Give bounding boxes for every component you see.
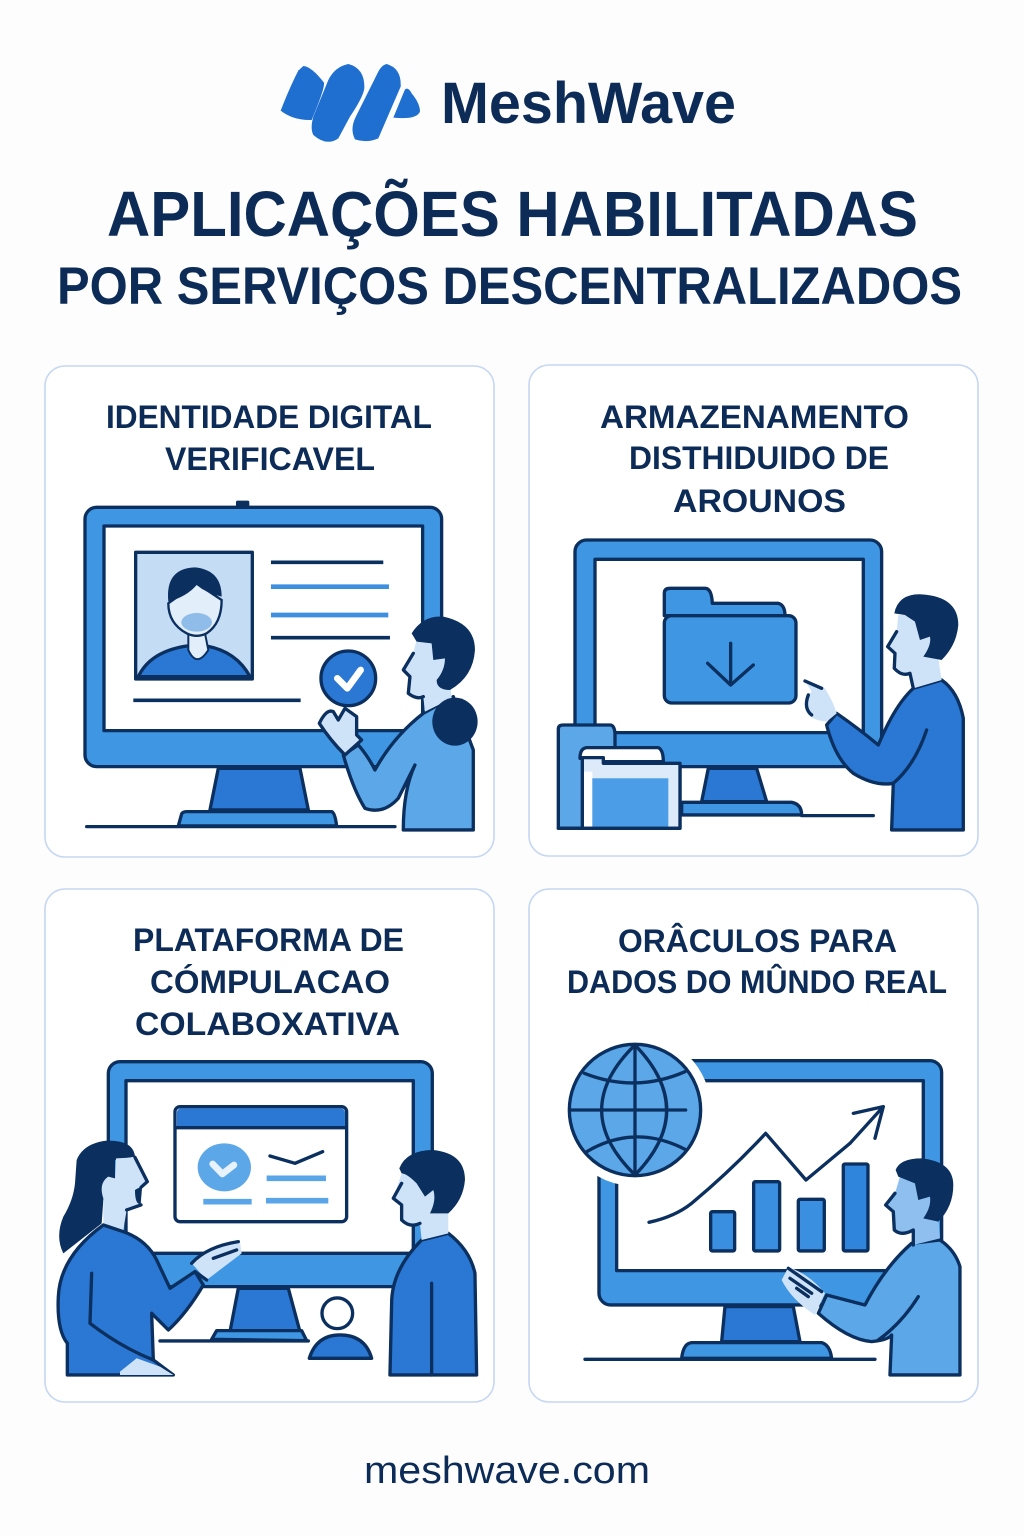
title: APLICAÇÕES HABILITADAS	[107, 178, 918, 250]
heading: plataforma: PLATAFORMA DE	[133, 922, 404, 958]
person	[827, 680, 963, 830]
check badge	[321, 651, 376, 706]
panel: identidade digital	[45, 366, 494, 857]
heading: armazenamento: AROUNOS	[673, 483, 846, 519]
heading: plataforma: CÓMPULACAO	[150, 963, 390, 1000]
heading: plataforma: COLABOXATIVA	[135, 1006, 400, 1042]
bars	[711, 1212, 735, 1251]
illustration: two people at monitor	[58, 1062, 477, 1375]
woman	[59, 1141, 135, 1253]
footer url: meshwave.com	[364, 1450, 650, 1492]
trend arrow	[649, 1107, 883, 1222]
person	[818, 1240, 960, 1375]
panel: armazenamento distribuido	[529, 365, 978, 856]
heading: oraculos	[567, 922, 947, 1000]
logo: MeshWave	[281, 64, 736, 142]
hand	[319, 708, 362, 755]
info lines	[133, 562, 390, 700]
heading: oraculos: DADOS DO MÛNDO REAL	[567, 962, 947, 1000]
heading: identidade digital	[106, 399, 432, 477]
stacked folders	[558, 725, 680, 828]
heading: armazenamento	[600, 399, 909, 519]
illustration: monitor with folders	[558, 540, 963, 830]
illustration: monitor with ID profile	[85, 501, 478, 830]
photo	[136, 552, 252, 679]
panel: computacao colaborativa	[45, 889, 494, 1402]
man	[390, 1233, 477, 1375]
illustration: globe and chart	[559, 1034, 960, 1375]
heading: identidade digital: VERIFICAVEL	[165, 441, 375, 477]
user icon	[322, 1298, 353, 1329]
heading: oraculos: ORÂCULOS PARA	[618, 922, 897, 959]
heading: identidade digital: IDENTIDADE DIGITAL	[106, 399, 432, 435]
person body	[343, 697, 473, 830]
heading: armazenamento: DISTHIDUIDO DE	[629, 440, 889, 476]
title	[57, 178, 962, 316]
folder with arrow	[664, 588, 785, 616]
heading: plataforma	[133, 922, 404, 1042]
globe	[569, 1044, 701, 1176]
panel: oraculos	[529, 889, 978, 1402]
app window	[175, 1107, 347, 1222]
logo wordmark: MeshWave	[441, 71, 736, 136]
icon: wave mark	[281, 64, 420, 142]
heading: armazenamento: ARMAZENAMENTO	[600, 399, 909, 435]
subtitle: POR SERVIÇOS DESCENTRALIZADOS	[57, 257, 962, 316]
